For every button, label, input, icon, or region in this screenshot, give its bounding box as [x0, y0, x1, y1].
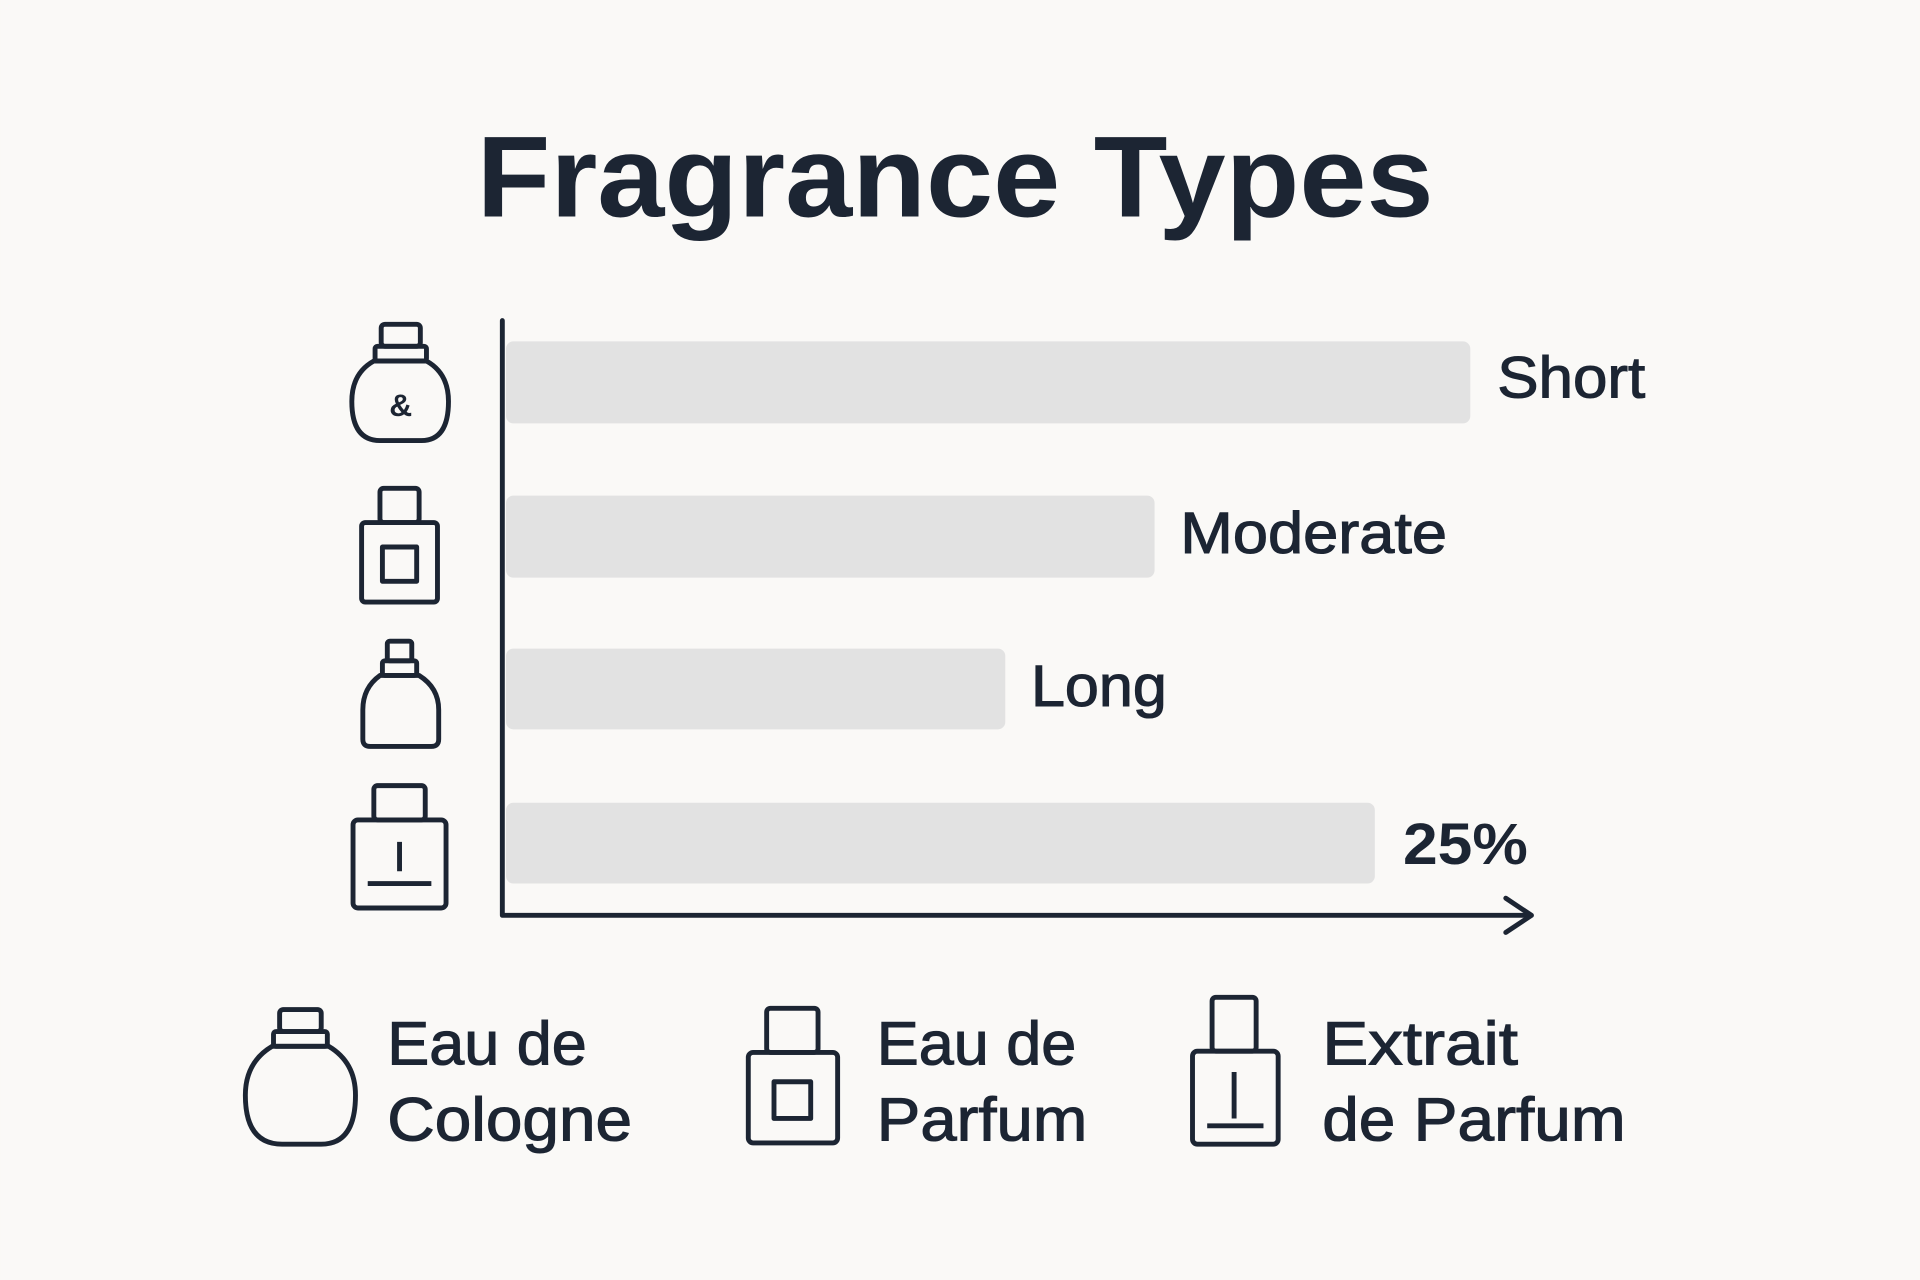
bar: 25%: 25% — [1403, 812, 1528, 877]
legend: extrait de parfum: de Parfum — [1322, 1085, 1626, 1153]
row icons — [352, 324, 448, 908]
bar: short: Short — [1497, 346, 1645, 411]
legend: eau de parfum: Parfum — [877, 1085, 1087, 1153]
legend — [245, 997, 1626, 1153]
legend: extrait de parfum — [1193, 997, 1626, 1153]
axes — [502, 321, 1531, 932]
bar: long — [506, 649, 1167, 729]
icon: soft bottle — [363, 641, 439, 746]
legend: extrait de parfum: Extrait — [1322, 1010, 1518, 1078]
title: Fragrance Types — [477, 114, 1434, 242]
bar chart — [502, 321, 1645, 932]
bar: 25% — [506, 803, 1528, 884]
bar: short — [506, 341, 1645, 423]
legend: eau de parfum — [748, 1008, 1087, 1153]
legend: eau de cologne: Cologne — [387, 1085, 632, 1153]
icon: extrait bottle — [353, 786, 446, 908]
legend: eau de parfum: Eau de — [877, 1010, 1076, 1078]
icon: round bottle & — [352, 324, 448, 441]
icon: square bottle — [362, 488, 437, 602]
bar: moderate: Moderate — [1180, 501, 1447, 566]
legend: eau de cologne: Eau de — [387, 1010, 587, 1078]
icon: round bottle &: & — [389, 387, 412, 423]
bar: moderate — [506, 496, 1447, 578]
legend: eau de cologne — [245, 1010, 632, 1153]
bar: long: Long — [1031, 654, 1167, 719]
